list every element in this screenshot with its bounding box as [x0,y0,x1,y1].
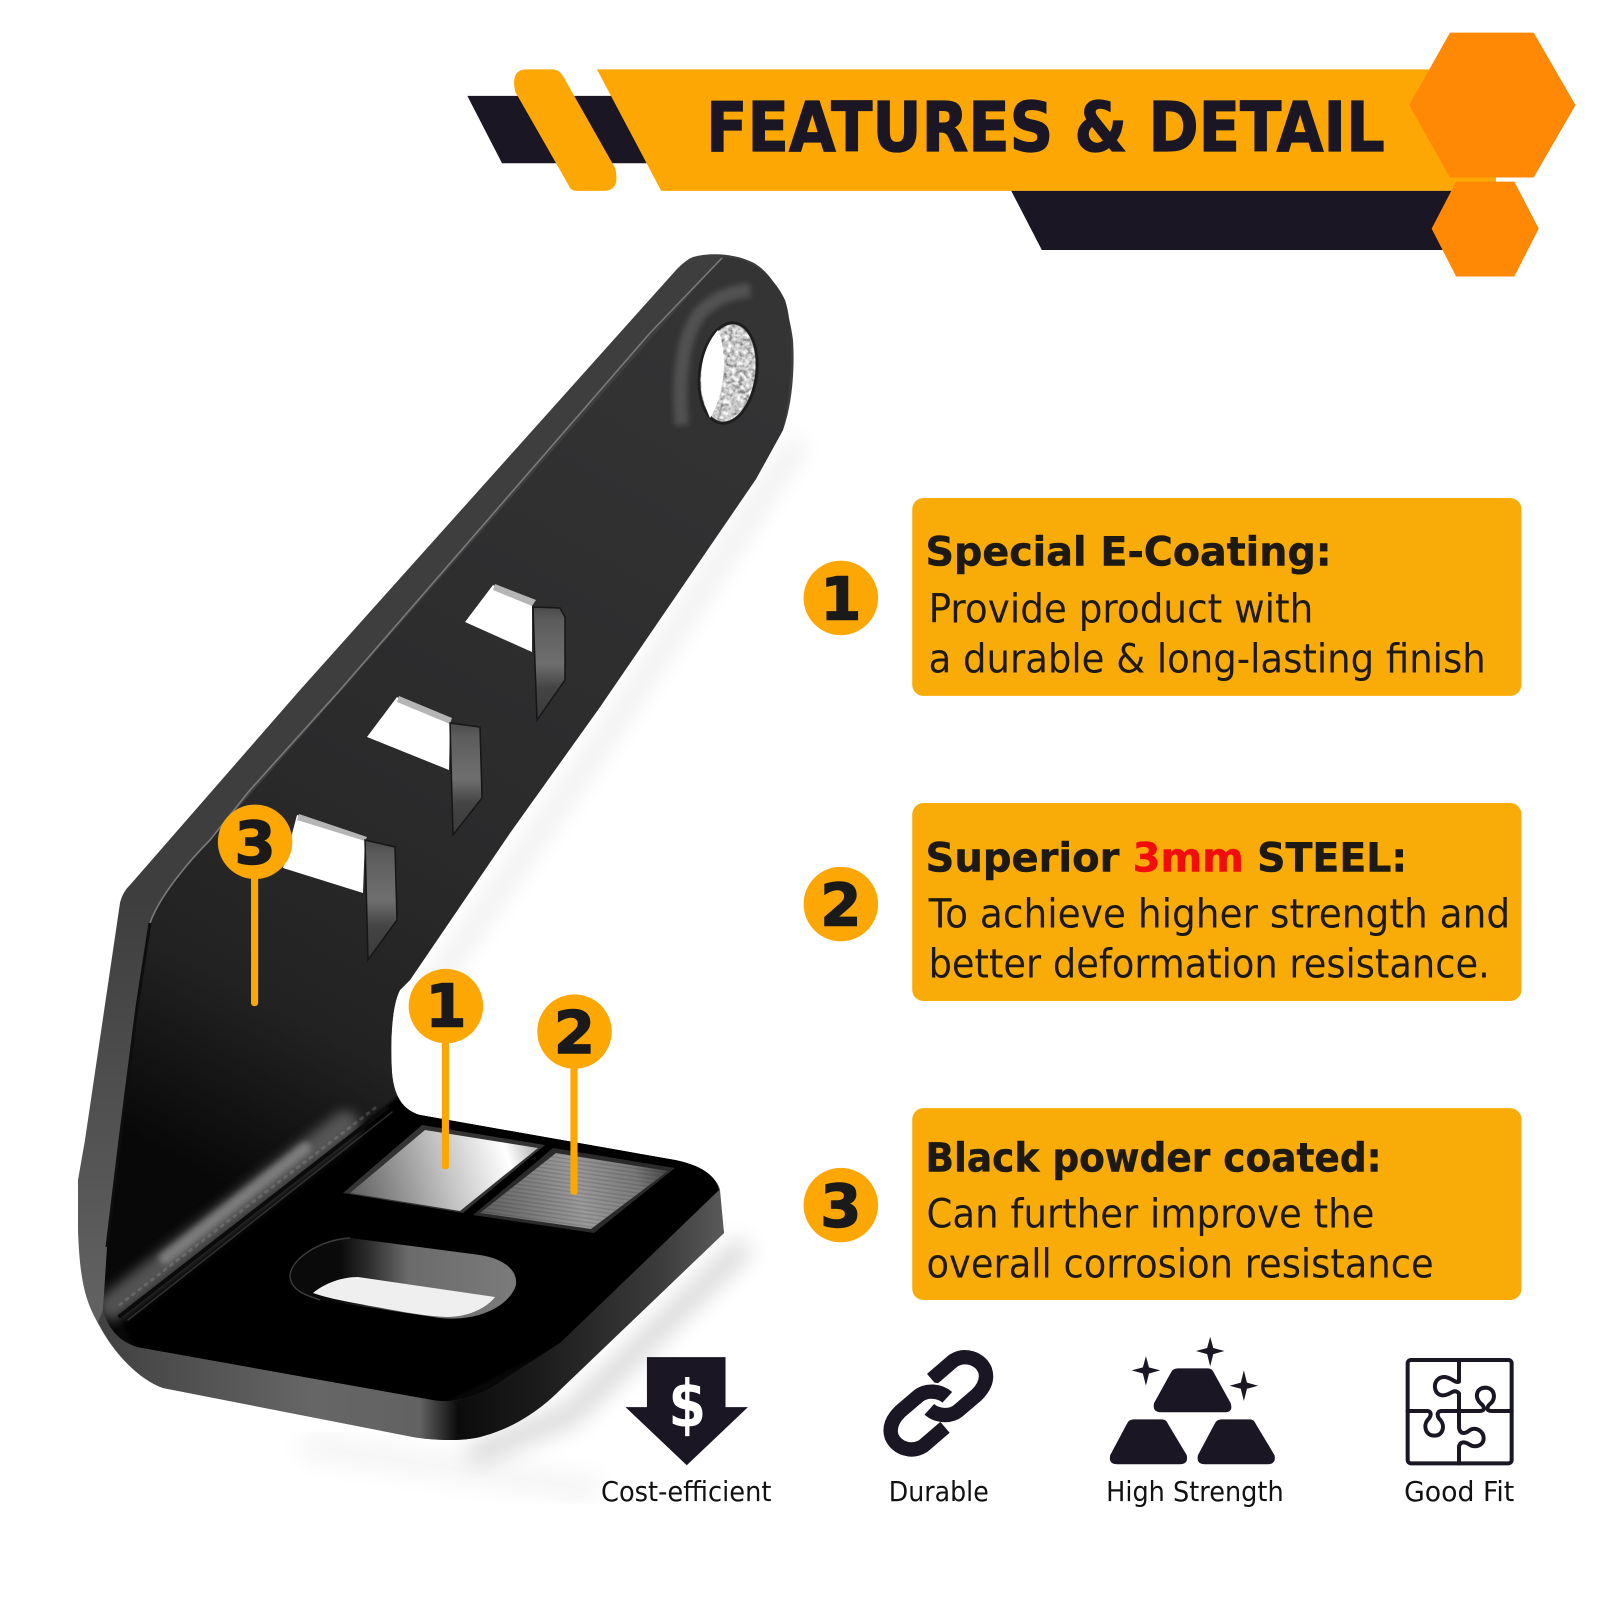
callout: marker 3 on arm: 3 [235,808,276,877]
callout: marker 2 on swatch [537,994,612,1195]
feature 2: superior 3mm steel: STEEL: [1257,835,1407,881]
label: durable: Durable [889,1476,989,1508]
feature 2: superior 3mm steel: 3mm [1133,835,1244,881]
callout: marker 1 on swatch: 1 [425,972,467,1041]
feature 1: special e-coating: 1 [820,564,861,633]
bracket face [90,240,810,1420]
mounting hole [680,290,765,429]
product photo: black steel bracket [78,240,810,1490]
feature 2: superior 3mm steel: 2 [820,871,861,940]
base slot hole [290,1238,516,1319]
icon: durable chain link [889,1357,989,1508]
icon: good fit puzzle [1404,1360,1514,1508]
label: good fit: Good Fit [1404,1476,1514,1508]
callout: marker 2 on swatch: 2 [554,998,595,1067]
swatch 2: bare steel [473,1148,675,1233]
feature 3: black powder coated: overall corrosion resistance [927,1242,1434,1288]
feature 2: superior 3mm steel: Superior [926,835,1120,881]
feature 1: special e-coating: Special E-Coating: [926,529,1332,575]
feature 3: black powder coated: Can further improve the [927,1192,1374,1238]
feature 2: superior 3mm steel: better deformation resistance. [929,942,1490,988]
crease highlight [112,1108,392,1320]
feature 1: special e-coating: a durable & long-lasting finish [929,636,1486,682]
swatch 1: coated finish [343,1125,545,1213]
callout: marker 3 on arm [218,805,292,1006]
callout: marker 1 on swatch [409,969,483,1169]
feature 2: superior 3mm steel [804,803,1521,1001]
feature 2: superior 3mm steel: To achieve higher strength and [928,892,1510,938]
icon: cost-efficient arrow: $ [668,1367,706,1443]
feature 3: black powder coated: Black powder coated: [926,1135,1382,1181]
feature 1: special e-coating [804,498,1521,696]
silhouette and edge thickness [78,254,794,1440]
feature 1: special e-coating: Provide product with [929,586,1313,632]
icon: cost-efficient arrow [601,1357,772,1508]
icon: high strength gold bars [1106,1337,1284,1508]
label: cost-efficient: Cost-efficient [601,1476,772,1508]
feature 3: black powder coated: 3 [820,1172,861,1241]
banner: features and detail header [467,33,1576,277]
title: FEATURES & DETAIL [706,89,1385,168]
feature 3: black powder coated [804,1108,1521,1300]
arm slots [283,584,565,960]
label: high strength: High Strength [1106,1476,1284,1508]
